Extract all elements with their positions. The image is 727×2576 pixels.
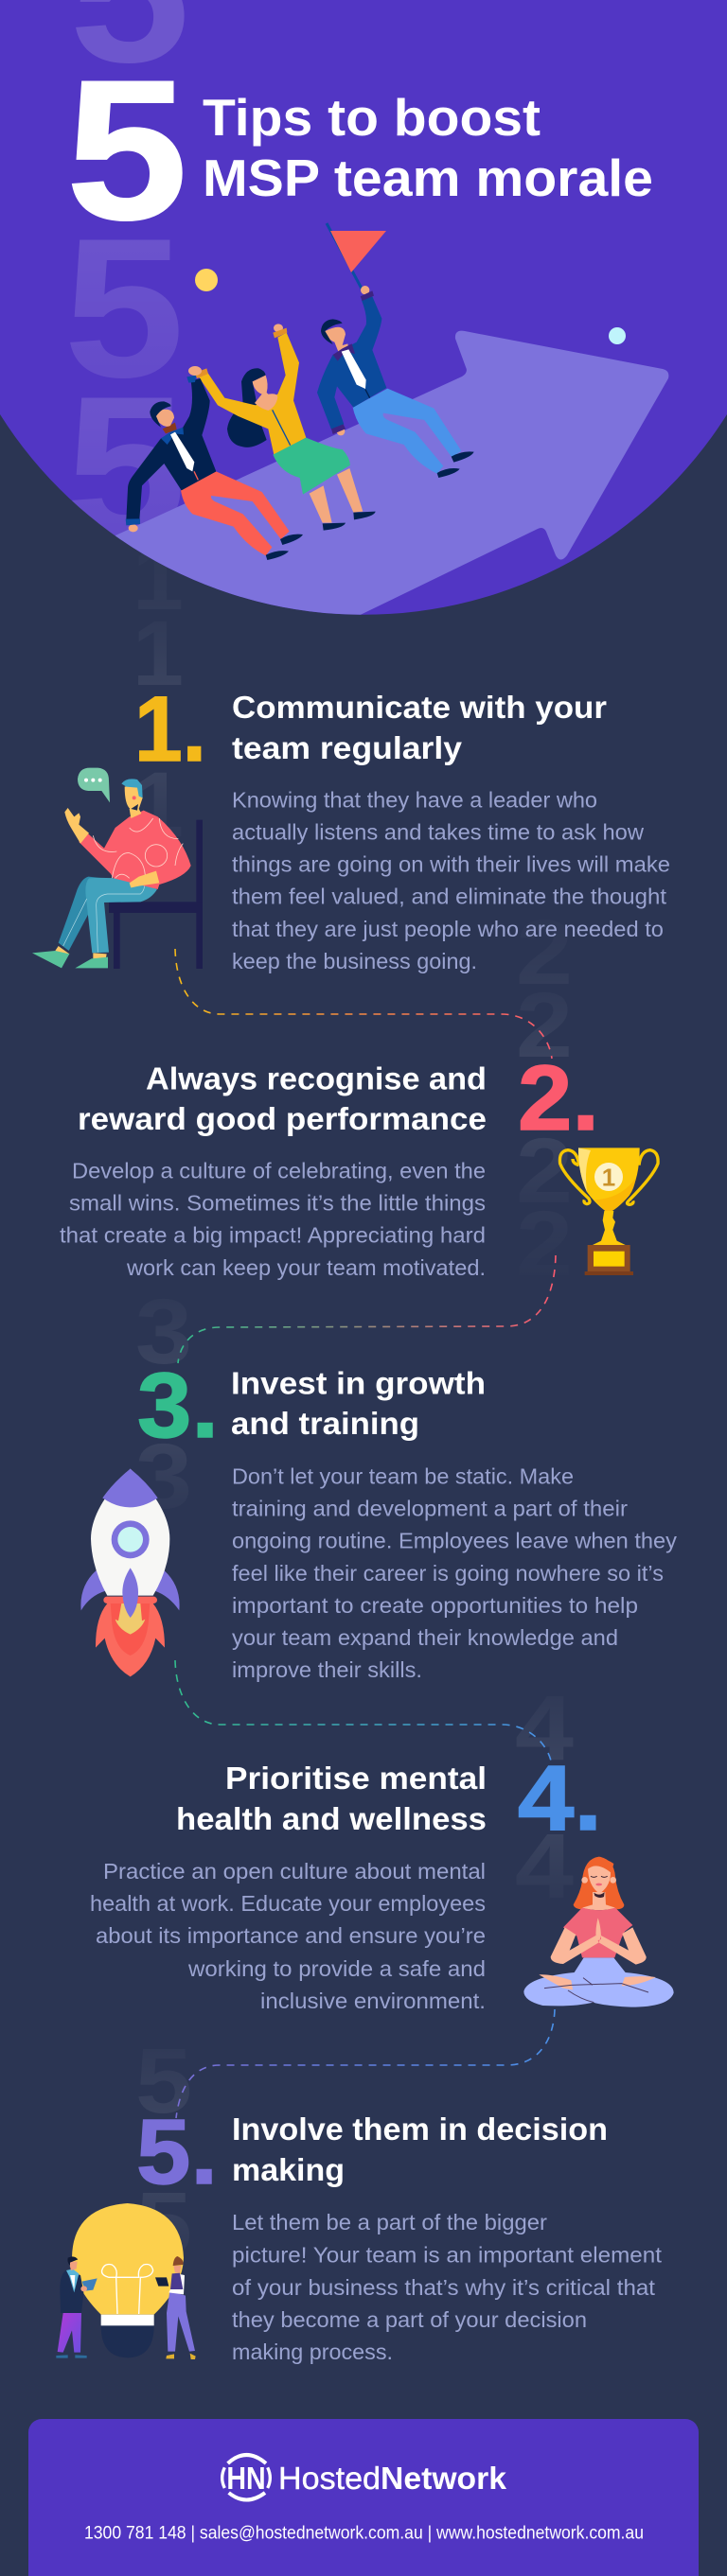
ghost numerals: 3: 3 bbox=[135, 1280, 192, 1383]
person: woman bbox=[194, 324, 376, 531]
number 4: 4. bbox=[518, 1746, 602, 1849]
body 3: important to create opportunities to help bbox=[232, 1593, 638, 1618]
contact line: 1300 781 148 | sales@hostednetwork.com.au | www.hostednetwork.com.au bbox=[84, 2524, 644, 2543]
body 3: Don’t let your team be static. Make bbox=[232, 1464, 574, 1489]
section 5 bbox=[56, 2100, 663, 2364]
ghost numerals: 4 bbox=[515, 1676, 574, 1918]
ghost numerals: hero fives: 5 bbox=[63, 197, 185, 419]
number 2: 2. bbox=[518, 1046, 599, 1149]
title: Tips to boost bbox=[203, 88, 541, 147]
body 5 bbox=[232, 2210, 663, 2364]
ghost numerals: 5: 5 bbox=[135, 2029, 192, 2132]
body 3: improve their skills. bbox=[232, 1657, 422, 1682]
body 1: actually listens and takes time to ask how bbox=[232, 819, 644, 844]
ghost numerals: 2: 2 bbox=[516, 973, 573, 1077]
heading 2: Always recognise and bbox=[146, 1061, 487, 1095]
body 5: picture! Your team is an important element bbox=[232, 2242, 663, 2267]
ghost numerals: 5: 5 bbox=[135, 2173, 192, 2276]
dashed connector 2 to 3 bbox=[178, 1255, 556, 1363]
heading 1: Communicate with your bbox=[232, 690, 607, 725]
icon: trophy bbox=[559, 1148, 658, 1275]
body 1: keep the business going. bbox=[232, 949, 477, 973]
footer panel bbox=[28, 2419, 699, 2576]
heading 3: and training bbox=[231, 1406, 419, 1441]
flag bbox=[327, 223, 386, 289]
icon: man on chair talking bbox=[32, 768, 203, 969]
logo wordmark: Network bbox=[381, 2461, 507, 2496]
body 3: ongoing routine. Employees leave when they bbox=[232, 1529, 678, 1553]
heading 5: making bbox=[232, 2152, 345, 2187]
heading 4: health and wellness bbox=[176, 1801, 487, 1836]
ghost numerals: 5 bbox=[135, 2029, 192, 2276]
heading 4 bbox=[176, 1761, 487, 1836]
heading 5: Involve them in decision bbox=[232, 2112, 608, 2147]
icon: light bulb with two people bbox=[56, 2203, 196, 2359]
person: woman with tablet bbox=[155, 2256, 196, 2359]
icon: rocket bbox=[80, 1469, 180, 1676]
title big numeral: 5 bbox=[66, 39, 187, 261]
heading 3 bbox=[231, 1366, 486, 1441]
ghost numerals: hero fives bbox=[70, 0, 184, 535]
body 4: working to provide a safe and bbox=[187, 1956, 486, 1981]
body 1: Knowing that they have a leader who bbox=[232, 787, 597, 812]
person: man with flag bbox=[317, 286, 474, 478]
section 3 bbox=[80, 1354, 678, 1682]
dashed connector 1 to 2 bbox=[175, 949, 552, 1059]
heading 1: team regularly bbox=[232, 730, 463, 765]
ghost numerals: 2 bbox=[516, 901, 573, 1295]
body 3: training and development a part of their bbox=[232, 1497, 628, 1521]
ghost numerals: 2: 2 bbox=[516, 901, 573, 1004]
title: MSP team morale bbox=[203, 149, 653, 207]
ghost numerals: 2: 2 bbox=[516, 1192, 573, 1295]
ghost numerals: 2: 2 bbox=[516, 1119, 573, 1222]
heading 4: Prioritise mental bbox=[225, 1761, 487, 1796]
ghost numerals: 1 bbox=[133, 526, 184, 856]
body 2 bbox=[60, 1159, 486, 1280]
body 4 bbox=[90, 1859, 486, 2013]
body 2: work can keep your team motivated. bbox=[126, 1255, 486, 1280]
body 5: of your business that’s why it’s critical that bbox=[232, 2275, 656, 2300]
body 3: feel like their career is going nowhere so it’s bbox=[232, 1561, 664, 1586]
body 5: making process. bbox=[232, 2339, 393, 2364]
body 5: they become a part of your decision bbox=[232, 2307, 587, 2332]
body 1: that they are just people who are needed to bbox=[232, 917, 664, 941]
number 5: 5. bbox=[136, 2100, 218, 2203]
section 1 bbox=[32, 677, 670, 973]
body 1: them feel valued, and eliminate the thought bbox=[232, 884, 667, 908]
logo mark bbox=[222, 2455, 270, 2499]
heading 3: Invest in growth bbox=[231, 1366, 486, 1400]
hero panel bbox=[0, 0, 727, 662]
ghost numerals: 3 bbox=[135, 1280, 192, 1528]
body 2: small wins. Sometimes it’s the little things bbox=[69, 1191, 486, 1216]
dashed connector 3 to 4 bbox=[175, 1660, 552, 1765]
person: man in coral trousers bbox=[126, 366, 303, 560]
icon: meditating woman bbox=[523, 1857, 674, 2007]
speech bubble bbox=[78, 768, 110, 802]
person: man with tablet bbox=[56, 2256, 98, 2358]
body 4: about its importance and ensure you’re bbox=[96, 1923, 486, 1948]
cyan dot bbox=[609, 327, 626, 344]
logo wordmark: Hosted bbox=[278, 2461, 381, 2496]
body 4: health at work. Educate your employees bbox=[90, 1891, 486, 1916]
ghost numerals: 4: 4 bbox=[515, 1814, 574, 1918]
body 4: inclusive environment. bbox=[260, 1989, 486, 2013]
ghost numerals: 1: 1 bbox=[133, 753, 184, 856]
ghost numerals: 4: 4 bbox=[515, 1676, 574, 1779]
ghost numerals: 1: 1 bbox=[133, 602, 184, 705]
body 4: Practice an open culture about mental bbox=[103, 1859, 486, 1884]
body 5: Let them be a part of the bigger bbox=[232, 2210, 547, 2234]
ghost numerals: 3: 3 bbox=[135, 1425, 192, 1528]
title bbox=[203, 88, 653, 207]
body 2: that create a big impact! Appreciating hard bbox=[60, 1223, 486, 1248]
body 1 bbox=[232, 787, 670, 973]
heading 2 bbox=[78, 1061, 487, 1136]
yellow dot bbox=[195, 269, 218, 291]
icon: trophy: 1 bbox=[602, 1163, 615, 1191]
body 2: Develop a culture of celebrating, even the bbox=[72, 1159, 486, 1183]
logo wordmark bbox=[278, 2461, 507, 2496]
heading 5 bbox=[232, 2112, 608, 2187]
body 3: your team expand their knowledge and bbox=[232, 1625, 618, 1650]
dashed connector 4 to 5 bbox=[176, 2009, 555, 2118]
ghost numerals: hero fives: 5 bbox=[65, 355, 186, 577]
heading 2: reward good performance bbox=[78, 1101, 487, 1136]
section 2 bbox=[60, 1046, 658, 1280]
illustration: three team members climbing arrow bbox=[126, 286, 474, 560]
section 4 bbox=[90, 1746, 674, 2013]
heading 1 bbox=[232, 690, 607, 765]
number 1: 1. bbox=[134, 677, 206, 780]
logo mark: HN bbox=[226, 2462, 266, 2497]
ghost numerals: 1: 1 bbox=[133, 526, 184, 629]
big growth arrow bbox=[115, 331, 668, 615]
body 3 bbox=[232, 1464, 678, 1682]
body 1: things are going on with their lives will make bbox=[232, 851, 670, 876]
number 3: 3. bbox=[137, 1354, 219, 1457]
